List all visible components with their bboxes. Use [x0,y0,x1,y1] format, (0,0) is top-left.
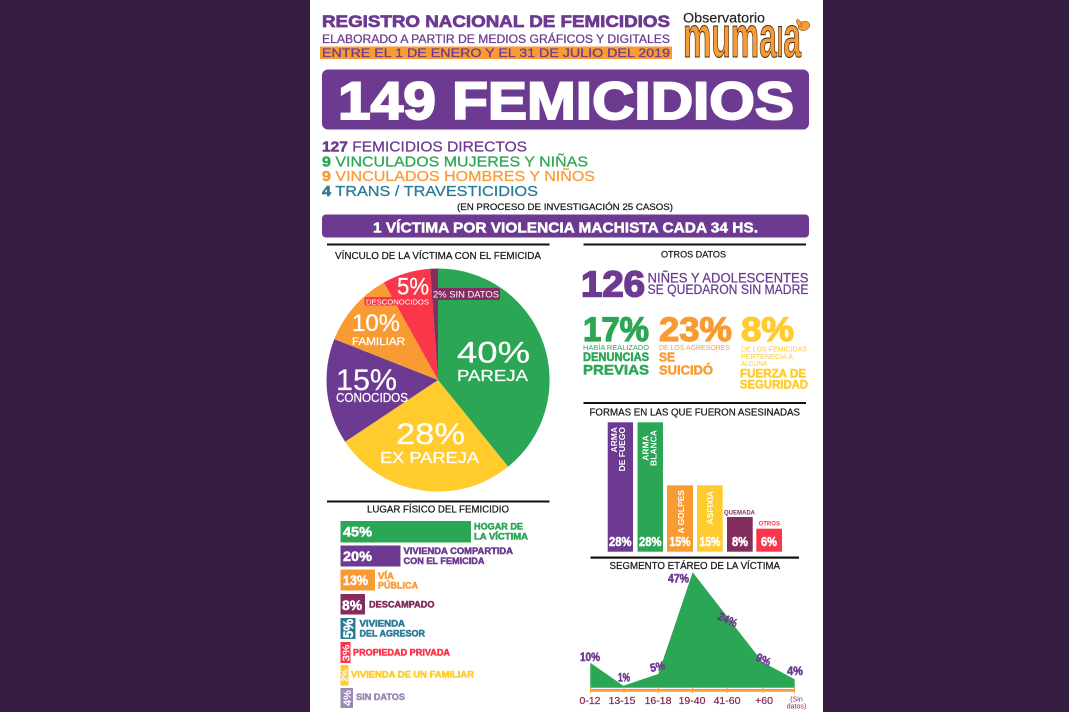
breakdown list: 9 VINCULADOS MUJERES Y NIÑAS [322,153,588,170]
panel: lugar fisico bars: 45% [343,524,373,540]
panel: lugar fisico bars: 4% [342,690,354,706]
panel: vinculo pie chart [327,244,550,492]
panel: segmento etareo area chart: SEGMENTO ETÁREO DE LA VÍCTIMA [610,559,780,572]
panel: formas bar chart: BLANCA [648,430,658,466]
panel: segmento etareo area chart: 19-40 [679,695,706,707]
panel: formas bar chart [584,402,806,552]
panel: otros datos: SEGURIDAD [740,377,808,391]
panel: segmento etareo area chart: 0-12 [579,695,601,707]
logo: Observatorio Mumala: mumala [683,5,801,70]
panel: formas bar chart: 6% [761,535,777,549]
panel: segmento etareo area chart: 41-60 [714,695,741,707]
panel: segmento etareo area chart: datos) [787,703,806,710]
panel: formas bar chart: 8% [732,535,748,549]
panel: otros datos: 8% [741,311,794,349]
panel: formas bar chart: 28% [639,535,662,549]
panel: otros datos: SUICIDÓ [659,362,713,377]
panel: segmento etareo area chart: 47% [668,573,689,585]
breakdown list: 4 TRANS / TRAVESTICIDIOS [322,184,538,200]
panel: otros datos: DE LOS AGRESORES [659,343,730,352]
panel: lugar fisico bars: DESCAMPADO [369,599,434,609]
panel: otros datos: 23% [659,311,732,349]
breakdown list: (EN PROCESO DE INVESTIGACIÓN 25 CASOS) [457,202,673,213]
panel: segmento etareo area chart: 9% [754,652,772,669]
panel: vinculo pie chart: 10% [352,310,400,337]
panel: formas bar chart: QUEMADA [724,510,755,517]
header text [320,13,672,60]
panel: vinculo pie chart: EX PAREJA [380,450,479,467]
panel: formas bar chart: 28% [609,535,632,549]
panel: lugar fisico bars: PÚBLICA [378,580,418,591]
panel: lugar fisico bars: VIVIENDA COMPARTIDA [404,546,514,556]
panel: segmento etareo area chart: (Sin [790,697,803,704]
panel: vinculo pie chart: 15% [336,364,397,397]
panel: otros datos: NIÑES Y ADOLESCENTES [648,270,808,285]
panel: otros datos: SE [659,350,675,365]
panel: formas bar chart: ARMA [640,435,650,461]
panel: segmento etareo area chart: 16-18 [645,695,672,707]
header text: ENTRE EL 1 DE ENERO Y EL 31 DE JULIO DEL 2019 [322,46,670,60]
panel: vinculo pie chart: 5% [397,273,429,300]
panel: segmento etareo area chart: 5% [649,660,666,675]
panel: lugar fisico bars: DEL AGRESOR [360,628,425,638]
panel: otros datos: PREVIAS [583,361,649,377]
panel: vinculo pie chart: DESCONOCIDOS [366,297,429,306]
panel: lugar fisico bars: PROPIEDAD PRIVADA [353,647,450,657]
logo: Observatorio Mumala: Observatorio [683,10,765,26]
panel: segmento etareo area chart: 13-15 [609,695,636,707]
panel: otros datos: ALGUNA [741,359,767,368]
panel: otros datos: HABÍA REALIZADO [583,343,649,352]
panel: formas bar chart: 15% [670,535,690,549]
panel: segmento etareo area chart: +60 [755,695,773,707]
panel: otros datos: FUERZA DE [740,366,806,380]
panel: otros datos: PERTENECÍA A [741,352,793,361]
panel: segmento etareo area chart [579,556,806,710]
panel: lugar fisico bars: 5% [340,618,356,638]
panel: vinculo pie chart: PAREJA [457,368,528,385]
panel: lugar fisico bars: VIVIENDA [360,618,406,628]
breakdown list: 9 VINCULADOS HOMBRES Y NIÑOS [322,168,595,185]
panel: otros datos: DE LOS FEMICIDAS [741,344,807,353]
panel: lugar fisico bars: LA VÍCTIMA [474,532,529,542]
panel: vinculo pie chart: 40% [457,337,530,370]
panel: formas bar chart: FORMAS EN LAS QUE FUERON ASESINADAS [590,408,800,419]
banner: 1 victima cada 34 hs [322,214,809,238]
breakdown list [322,140,673,213]
panel: vinculo pie chart: 2% SIN DATOS [433,290,499,300]
panel: lugar fisico bars: VÍA [378,571,395,581]
panel: formas bar chart: OTROS [758,520,781,527]
panel: segmento etareo area chart: 10% [580,652,600,664]
panel: lugar fisico bars: 2% [340,669,350,682]
panel: vinculo pie chart: VÍNCULO DE LA VÍCTIMA CON EL FEMICIDA [335,249,541,262]
panel: formas bar chart: 15% [700,535,720,549]
panel: formas bar chart: A GOLPES [676,490,686,534]
panel: otros datos: 126 [581,264,645,305]
panel: lugar fisico bars: LUGAR FÍSICO DEL FEMICIDIO [367,503,509,516]
header text: REGISTRO NACIONAL DE FEMICIDIOS [322,13,670,31]
panel: vinculo pie chart: CONOCIDOS [336,391,408,405]
panel: formas bar chart: DE FUEGO [617,427,627,471]
panel: lugar fisico bars: 20% [343,548,373,564]
panel: otros datos: SE QUEDARON SIN MADRE [648,282,808,297]
header text: ELABORADO A PARTIR DE MEDIOS GRÁFICOS Y DIGITALES [322,33,670,46]
panel: lugar fisico bars: 8% [342,597,363,613]
panel: formas bar chart: ARMA [609,427,619,452]
banner: 149 femicidios: 149 FEMICIDIOS [338,72,794,131]
panel: segmento etareo area chart: 4% [787,666,803,678]
breakdown list: 127 FEMICIDIOS DIRECTOS [322,140,527,156]
panel: lugar fisico bars: 3% [340,644,352,662]
panel: lugar fisico bars: CON EL FEMICIDA [404,556,485,566]
panel: lugar fisico bars: SIN DATOS [356,692,405,702]
panel: lugar fisico bars: 13% [343,572,368,588]
panel: lugar fisico bars [327,500,550,708]
panel: lugar fisico bars: VIVIENDA DE UN FAMILIAR [351,670,475,680]
panel: vinculo pie chart: FAMILIAR [352,336,405,348]
panel: segmento etareo area chart: 24% [716,611,739,630]
panel: otros datos: 17% [583,311,649,349]
panel: lugar fisico bars: HOGAR DE [474,522,523,532]
panel: formas bar chart: ASFIXIA [705,491,715,525]
panel: segmento etareo area chart: 1% [618,673,630,685]
panel: otros datos [581,244,808,391]
panel: otros datos: OTROS DATOS [661,250,726,261]
panel: vinculo pie chart: 28% [396,418,465,451]
panel: otros datos: DENUNCIAS [583,350,649,364]
banner: 1 victima cada 34 hs: 1 VÍCTIMA POR VIOLENCIA MACHISTA CADA 34 HS. [373,220,758,236]
